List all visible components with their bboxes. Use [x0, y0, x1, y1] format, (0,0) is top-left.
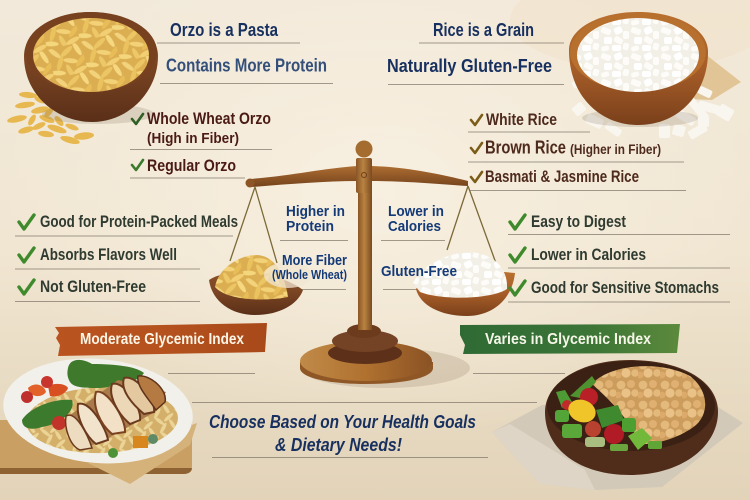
orzo bowl: [7, 12, 158, 146]
orzo plate meal: [0, 351, 197, 484]
check icon: [510, 215, 525, 229]
center comparison: orzo: (Whole Wheat): [272, 268, 347, 282]
center comparison: orzo: Higher in: [286, 203, 345, 220]
orange ribbon: [55, 323, 267, 356]
left chains: [230, 187, 277, 263]
orzo benefits list: Good for Protein-Packed Meals: [40, 213, 238, 231]
rice benefits list: Lower in Calories: [531, 246, 646, 264]
orange ribbon: Moderate Glycemic Index: [80, 331, 244, 348]
center comparison: orzo: More Fiber: [282, 252, 347, 269]
vegetables: [555, 376, 662, 451]
balance scale: [209, 140, 515, 388]
rice types list: White Rice: [486, 110, 557, 129]
orzo types list: (High in Fiber): [147, 130, 239, 147]
center comparison: orzo: Protein: [286, 218, 334, 235]
orzo headings: [166, 20, 327, 76]
bowl body: [569, 12, 708, 125]
beam: [250, 166, 468, 187]
paper under plate: [88, 423, 197, 484]
pasta: [25, 384, 179, 456]
green ribbon: [460, 324, 680, 354]
right chains: [447, 186, 497, 266]
loose orzo grains: [7, 91, 94, 146]
base shadow: [300, 348, 470, 388]
finial: [356, 140, 372, 158]
rice headings: Rice is a Grain: [433, 20, 534, 40]
plate: [0, 351, 197, 471]
left beam knob: [246, 178, 254, 188]
center comparison: orzo: [272, 203, 347, 282]
check icon: [19, 280, 34, 294]
orzo benefits list: [19, 213, 238, 296]
green ribbon: Varies in Glycemic Index: [485, 331, 651, 348]
check icon: [19, 248, 34, 262]
rice bowl: [569, 12, 741, 140]
cutting board: [0, 420, 192, 474]
orzo types list: Regular Orzo: [147, 156, 236, 175]
check icon: [19, 215, 34, 229]
tomatoes and peppers: [21, 376, 158, 458]
rice headings: [387, 20, 552, 76]
check icon: [471, 115, 482, 125]
check icon: [471, 172, 482, 182]
check icon: [510, 281, 525, 295]
orzo benefits list: Absorbs Flavors Well: [40, 246, 177, 264]
column: [358, 190, 372, 330]
bowl body: [24, 12, 158, 122]
base: [300, 324, 433, 384]
greens: [67, 360, 144, 388]
rice types list: (Higher in Fiber): [570, 141, 661, 157]
check icon: [132, 160, 143, 170]
check icon: [510, 248, 525, 262]
rice benefits list: Easy to Digest: [531, 213, 626, 231]
orzo headings: Orzo is a Pasta: [170, 20, 279, 40]
check icon: [132, 114, 143, 124]
check icon: [471, 143, 482, 153]
rice types list: Brown Rice: [485, 138, 566, 158]
right pan: [413, 252, 515, 316]
rice types list: [471, 110, 661, 158]
orzo headings: Contains More Protein: [166, 56, 327, 76]
loose rice: [571, 78, 735, 140]
hub: [356, 158, 372, 193]
orzo types list: [132, 109, 271, 175]
closing message: [209, 412, 476, 455]
orzo types list: Whole Wheat Orzo: [147, 109, 271, 128]
chicken slices: [66, 376, 166, 450]
grain and vegetable bowl: [492, 360, 743, 490]
left pan: [209, 255, 312, 315]
placemat: [660, 50, 741, 100]
center comparison: rice: Calories: [388, 218, 441, 235]
center comparison: rice: [381, 203, 457, 280]
rice headings: Naturally Gluten-Free: [387, 56, 552, 76]
rice benefits list: [510, 213, 719, 297]
basmati rice list item: Basmati & Jasmine Rice: [485, 167, 639, 186]
center comparison: rice: Gluten-Free: [381, 263, 457, 280]
bowl body: [545, 360, 718, 475]
center comparison: rice: Lower in: [388, 203, 444, 220]
napkin: [492, 405, 743, 490]
grains: [592, 366, 705, 444]
closing message: & Dietary Needs!: [275, 435, 402, 455]
orzo benefits list: Not Gluten-Free: [40, 278, 146, 296]
closing message: Choose Based on Your Health Goals: [209, 412, 476, 432]
